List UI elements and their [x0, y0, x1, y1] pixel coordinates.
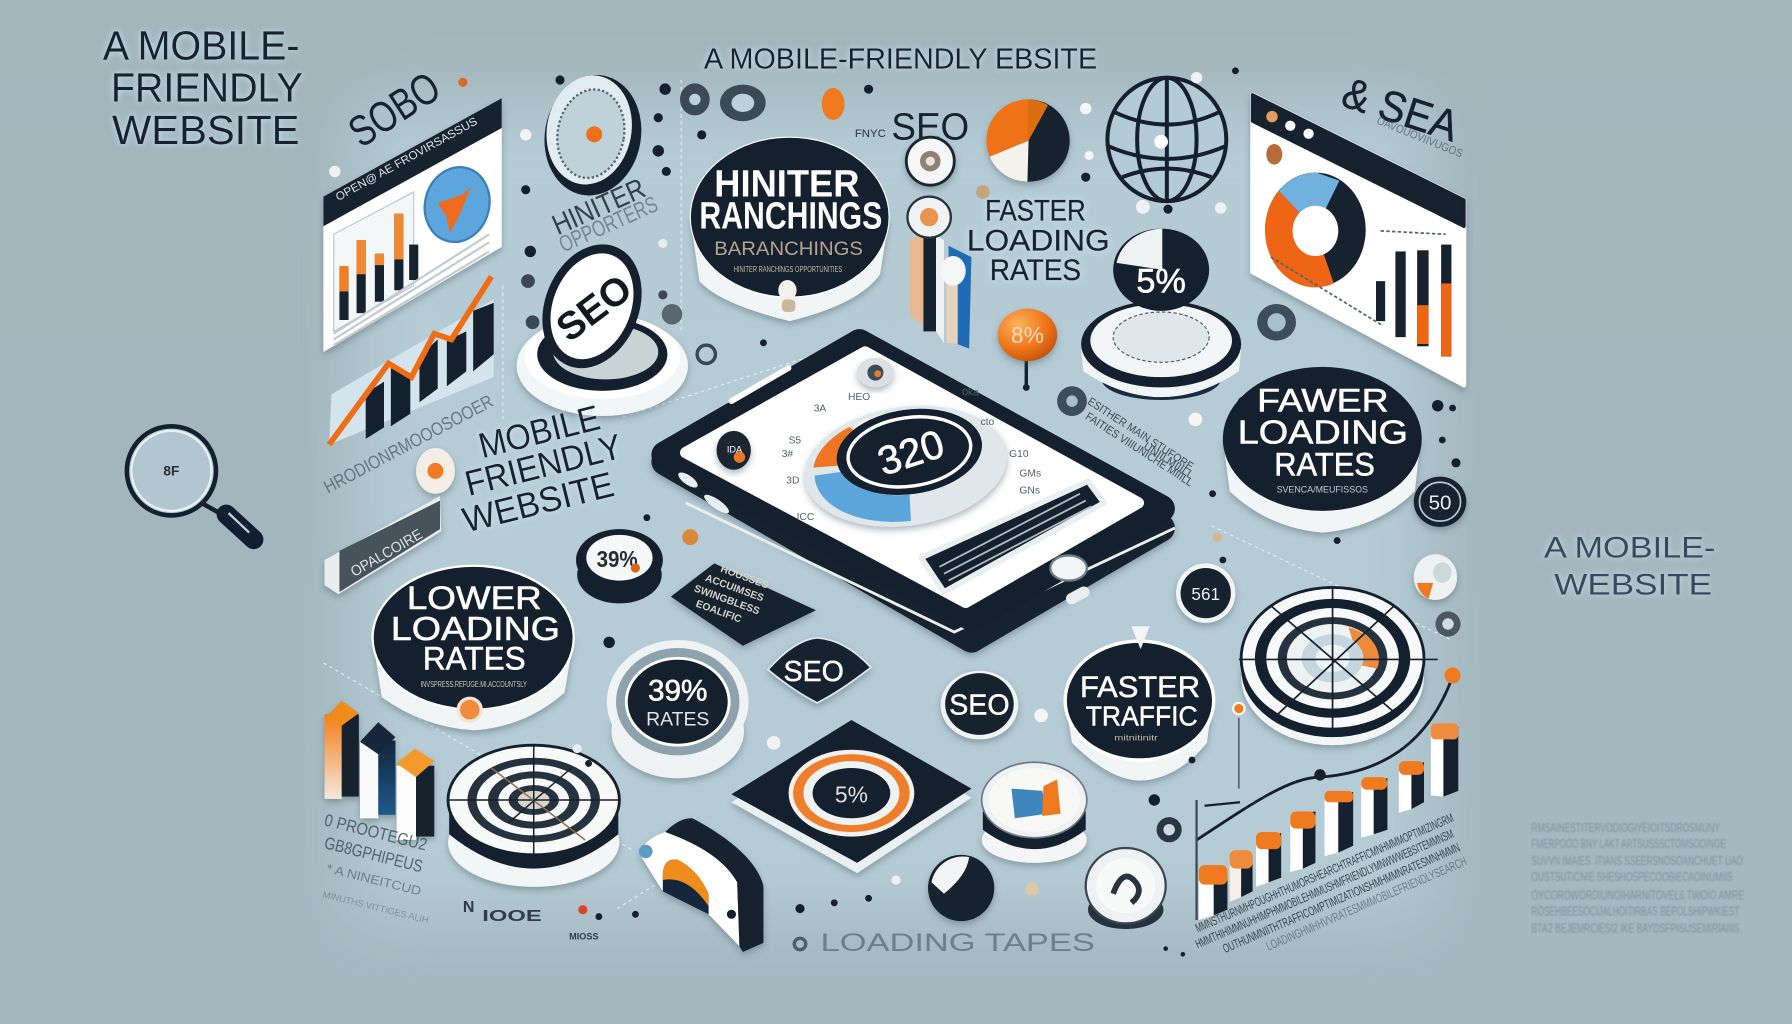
- text: faded block bottom left: [322, 810, 430, 925]
- text block: blurred paragraph right: [1531, 820, 1744, 936]
- badge: dark diamond label: SWINGBLESS: [692, 583, 761, 617]
- badge: 5% ball on base: [1081, 229, 1241, 400]
- title: left A Mobile-Friendly Website: [103, 22, 303, 153]
- badge: orange dot: [416, 448, 455, 494]
- slanted caption rows: MMNSTHURNMHPOUGHHTHUMORSHEARCHTRAFFICMNHMMMOPTIMIZINGRM: [1193, 811, 1456, 935]
- badge: 5% ball on base: 5%: [1136, 263, 1186, 301]
- slanted caption rows: [1193, 811, 1469, 956]
- donut chart: [1265, 173, 1366, 287]
- icon: dark ball: [928, 855, 994, 921]
- phone speaker: [731, 368, 789, 401]
- badge: Faster Traffic: TRAFFIC: [1086, 701, 1198, 732]
- text: faded label bottom: MIOSS: [569, 931, 599, 941]
- badge: 39% Rates: RATES: [646, 709, 709, 731]
- badge: Lower Loading Rates: INVSPRESS:REFUGE.MI.ACCOUNTSLY: [421, 679, 527, 689]
- annotation text beside phone: UNIII MIIILL: [1141, 440, 1196, 482]
- tiny labels on screen: S5: [789, 435, 801, 446]
- text: Hiniter opporters faded: HINITER: [548, 173, 650, 242]
- badge: orange ball: 8%: [1011, 322, 1044, 348]
- text: Faster Loading Rates: FASTER: [985, 195, 1086, 228]
- title: left A Mobile-Friendly Website: FRIENDLY: [111, 65, 303, 111]
- badge: 39% small: [576, 529, 663, 603]
- text: right A Mobile- Website: [1544, 532, 1715, 601]
- title: top centre: A MOBILE-FRIENDLY EBSITE: [704, 44, 1097, 76]
- badge: Hiniter Ranchings: BARANCHINGS: [714, 238, 863, 260]
- small icon top: [857, 358, 894, 387]
- tiny labels on screen: 3D: [786, 475, 799, 486]
- panel: browser with bar chart (left): OPEN@ AE FROVIRSASSUS: [334, 116, 480, 204]
- badge: Lower Loading Rates: RATES: [423, 641, 526, 677]
- chart: rising bars right: [1197, 667, 1461, 920]
- curve line: [1197, 667, 1461, 920]
- text: faded block bottom left: MINUTHS.VITTIGES ALIH: [322, 889, 430, 925]
- badge: dark diamond label: HOUSSES: [719, 564, 770, 592]
- bars: [1376, 245, 1451, 357]
- bars in browser: [334, 192, 418, 331]
- connector dots: [1034, 703, 1245, 789]
- tiny labels on screen: HEO: [848, 392, 870, 403]
- phone screen: [686, 352, 1138, 602]
- icon: small ring bottom: [1157, 817, 1182, 842]
- badge: Lower Loading Rates: LOADING: [391, 611, 560, 648]
- plate: label: [325, 496, 441, 594]
- badge: Fawer Loading Rates: RATES: [1274, 446, 1375, 482]
- badge: Faster Traffic: FASTER: [1080, 671, 1200, 704]
- home buttons: [1050, 555, 1091, 606]
- icons: small dark rings right: [976, 67, 1461, 563]
- tiny labels on screen: GMs: [1019, 469, 1041, 480]
- badge: 561: 561: [1191, 584, 1220, 604]
- small icon left: IDA: [727, 445, 743, 455]
- tiny labels on screen: [782, 387, 1041, 523]
- icon: small disc right: [1414, 554, 1457, 600]
- text: Mobile Friendly Website rotated: MOBILE: [475, 397, 604, 466]
- icon: small knob right: [1435, 611, 1461, 637]
- badge: Hiniter Ranchings: RANCHINGS: [699, 195, 882, 237]
- text: faded block bottom left: GB8GPHIPEUS: [322, 832, 425, 876]
- panel: browser with bar chart (left): [323, 98, 502, 352]
- badge: SEO diamond: [768, 638, 871, 703]
- badge: Hiniter Ranchings: [690, 137, 889, 321]
- badge: 39% Rates: 39%: [648, 675, 707, 708]
- heading: & SEA: & SEA: [1336, 69, 1464, 151]
- badge: SEO diamond: SEO: [784, 656, 844, 688]
- icon: ring: [906, 137, 954, 185]
- panel: diamond 5% dial: 5%: [835, 781, 868, 807]
- plate: label: OPALCOIRE: [348, 527, 426, 581]
- text: right A Mobile- Website: WEBSITE: [1554, 568, 1712, 601]
- badge: dark diamond label: EOALIFIC: [694, 599, 743, 626]
- text: Mobile Friendly Website rotated: [459, 397, 626, 540]
- panel: diamond 5% dial: [731, 720, 971, 873]
- badge: 50 circle: [1414, 477, 1466, 527]
- chart: 3D bars left: [325, 701, 434, 840]
- badge: Hiniter Ranchings: HINITER: [714, 163, 859, 205]
- icon: small rings top: [458, 75, 873, 257]
- dark strip panel: [921, 481, 1104, 592]
- text: Mobile Friendly Website rotated: FRIENDLY: [461, 426, 626, 504]
- text: faded label bottom: [463, 899, 599, 941]
- badge: Fawer Loading Rates: FAWER: [1257, 382, 1389, 418]
- slanted caption rows: OUTHUNMNIITHTRAFFICOMPTIMIZATIONSHMHMMNRATESMNHMMN: [1221, 841, 1462, 956]
- text: faded block bottom left: 0 PROOTEGU2: [322, 810, 429, 854]
- icon: striped column: [907, 197, 971, 349]
- text: faded block bottom left: * A NINEITCUD: [325, 861, 423, 898]
- heading: SEO top: SEO: [891, 105, 969, 147]
- panel: browser with donut and bars (right): [1253, 95, 1464, 385]
- tiny labels on screen: 3#: [782, 449, 793, 460]
- small icon left: [717, 431, 751, 470]
- scattered dots: [329, 129, 1341, 957]
- text: right A Mobile- Website: A MOBILE-: [1544, 532, 1715, 565]
- phone side buttons: [676, 470, 731, 516]
- small label FNYC: FNYC: [855, 128, 886, 140]
- slanted caption rows: HMMTHIHIMMNUHHIMPHMMOBILEHMMUSHMFRIENDLYMNWWWEBSITEMMNSM: [1193, 827, 1456, 951]
- icon: arch: [640, 818, 763, 952]
- text: Faster Loading Rates: LOADING: [967, 224, 1110, 257]
- phone: [665, 343, 1175, 639]
- tiny labels on screen: GNs: [1019, 486, 1040, 497]
- badge: dark diamond label: ACCUIMSES: [703, 573, 765, 604]
- badge: 50 circle: 50: [1429, 492, 1451, 515]
- heading: SOBO: SOBO: [340, 63, 449, 157]
- text: faded label bottom: IOOE: [482, 908, 542, 925]
- badge: SEO tilted coin: SEO: [549, 267, 640, 350]
- badge: Fawer Loading Rates: [1223, 367, 1422, 533]
- badge: Fawer Loading Rates: SVENCA/MEUFISSOS: [1277, 485, 1368, 495]
- icon: target right: [1239, 587, 1438, 745]
- donut value: 320: [873, 422, 950, 484]
- label strip under chart: HRODIONRMOOOSOOER: [320, 390, 496, 497]
- badge: SEO dark circle: [941, 671, 1018, 739]
- icon: target left: [448, 745, 619, 887]
- text: Loading Tapes: LOADING TAPES: [821, 929, 1095, 957]
- badge: Lower Loading Rates: [373, 566, 574, 730]
- badge: Faster Traffic: mitnitinitr: [1114, 734, 1158, 743]
- donut gauge: [797, 393, 1015, 539]
- badge: SEO tilted coin: [517, 229, 688, 416]
- tiny labels on screen: G10: [1009, 449, 1029, 460]
- badge: Hiniter Ranchings: HINITER RANCHINGS OPPORTUNITIES: [734, 265, 842, 274]
- badge: Fawer Loading Rates: LOADING: [1238, 414, 1408, 451]
- annotation text beside phone: FAITIES VIIIUNICHE MIIILL: [1083, 411, 1195, 489]
- pie in browser: [416, 160, 498, 249]
- annotation text beside phone: ESITHER MAIN STUFORE: [1085, 396, 1196, 473]
- badge: orange ball: [998, 309, 1057, 391]
- tiny labels on screen: 0ka: [962, 387, 979, 398]
- badge: Lower Loading Rates: LOWER: [407, 580, 542, 616]
- icon: knob disc: [1086, 848, 1166, 929]
- badge: dark diamond label: [671, 558, 816, 646]
- icon: disc with blue and orange: [982, 762, 1087, 863]
- text: faded label bottom: N: [463, 899, 474, 916]
- text: Faster Loading Rates: [967, 195, 1110, 287]
- tiny labels on screen: ICC: [797, 512, 815, 523]
- badge: 561: [1176, 563, 1235, 623]
- slanted caption rows: LOADINGHMHHVVRATESMMMOBILEFRIENDLYSEARCH: [1264, 854, 1469, 954]
- chart: rising line with bars: [329, 277, 494, 445]
- badge: SEO dark circle: SEO: [949, 689, 1010, 721]
- badge: 39% small: 39%: [597, 546, 638, 572]
- heading: & SEA: OAVOUOVIIVUGOS: [1375, 115, 1464, 161]
- badge: Faster Traffic: [1065, 626, 1214, 781]
- chart: pie: [986, 99, 1070, 182]
- text: Faster Loading Rates: RATES: [990, 254, 1081, 287]
- icon: globe: [1107, 78, 1226, 201]
- text: Hiniter opporters faded: OPPORTERS: [555, 191, 662, 257]
- icon: magnifying glass: [127, 426, 254, 539]
- icon: magnifying glass: 8F: [163, 463, 179, 478]
- title: left A Mobile-Friendly Website: A MOBILE-: [103, 22, 299, 68]
- icon: small gear before Loading Tapes: [794, 938, 806, 950]
- tiny labels on screen: 3A: [814, 403, 826, 414]
- icon: gauge: [535, 67, 651, 203]
- text: Mobile Friendly Website rotated: WEBSITE: [459, 464, 618, 540]
- tiny labels on screen: cto: [981, 417, 995, 428]
- title: left A Mobile-Friendly Website: WEBSITE: [112, 107, 299, 153]
- badge: 39% Rates: [607, 640, 749, 778]
